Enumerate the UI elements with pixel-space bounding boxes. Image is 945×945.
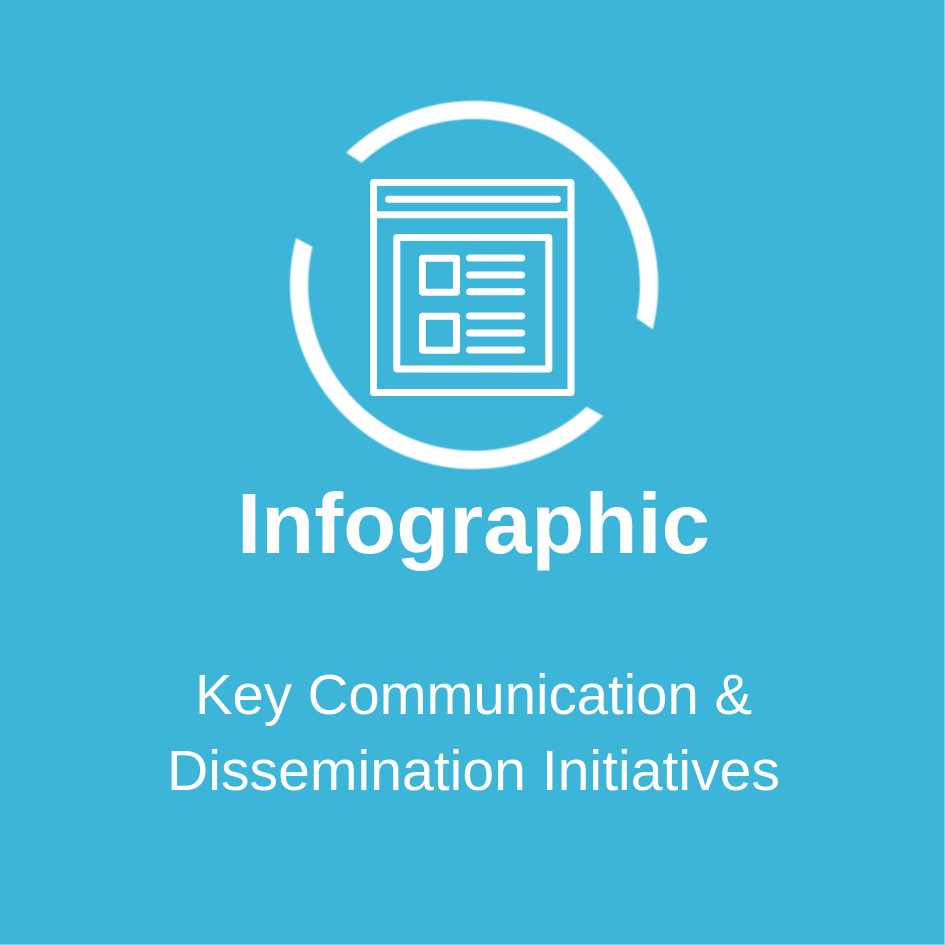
icon: circular arc ring [290, 101, 658, 469]
subtitle [167, 663, 780, 803]
subtitle: Dissemination Initiatives [167, 739, 780, 803]
title: Infographic [237, 477, 710, 572]
subtitle: Key Communication & [195, 663, 752, 727]
icon: web page window [374, 182, 571, 392]
